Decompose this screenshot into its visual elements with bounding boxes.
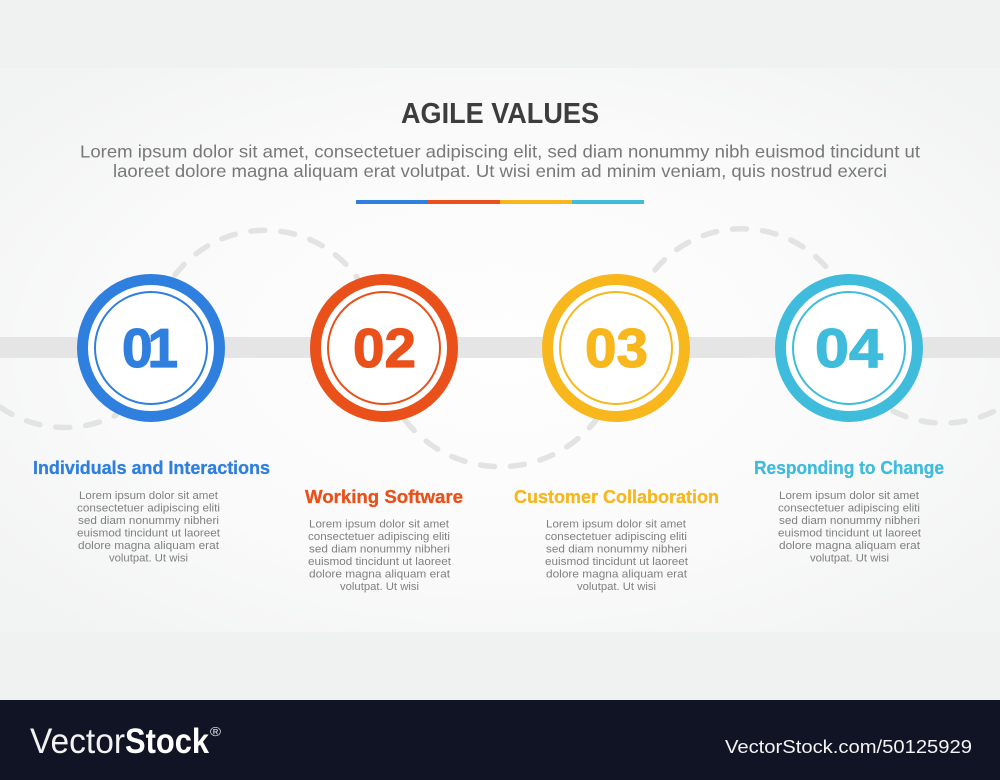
body text 02 <box>308 518 451 593</box>
body text 02: volutpat. Ut wisi <box>340 581 419 593</box>
footer bar <box>0 700 1000 780</box>
dashed connector arcs <box>0 229 1000 467</box>
step 04 text block <box>754 457 944 564</box>
body text 01: volutpat. Ut wisi <box>109 552 188 564</box>
step 03 circle <box>548 280 684 416</box>
subtitle text <box>80 142 920 181</box>
step 01 circle: 1 <box>148 317 178 379</box>
heading: individuals and interactions: Individuals and Interactions <box>33 457 270 478</box>
body text 02: dolore magna aliquam erat <box>309 568 450 580</box>
body text 01: Lorem ipsum dolor sit amet <box>79 490 218 502</box>
body text 04 <box>778 490 921 564</box>
body text 02: euismod tincidunt ut laoreet <box>308 556 451 568</box>
heading: customer collaboration: Customer Collaboration <box>514 486 719 507</box>
step 03 circle: 03 <box>585 317 648 379</box>
subtitle text: laoreet dolore magna aliquam erat volutpat. Ut wisi enim ad minim veniam, quis nostrud exerci <box>113 161 887 181</box>
timeline band <box>0 337 1000 358</box>
step 02 circle <box>316 280 452 416</box>
title: AGILE VALUES <box>401 98 599 130</box>
step 03 text block <box>514 486 719 593</box>
body text 04: dolore magna aliquam erat <box>779 540 920 552</box>
body text 01: consectetuer adipiscing eliti <box>77 502 220 514</box>
body text 03: Lorem ipsum dolor sit amet <box>546 518 686 530</box>
body text 04: consectetuer adipiscing eliti <box>778 502 920 514</box>
footer logo <box>30 722 221 761</box>
body text 03: euismod tincidunt ut laoreet <box>545 556 688 568</box>
body text 02: Lorem ipsum dolor sit amet <box>309 518 449 530</box>
body text 03: consectetuer adipiscing eliti <box>545 531 687 543</box>
step 01 text block <box>33 457 270 564</box>
footer logo: ® <box>210 724 221 739</box>
step 01 circle: 0 <box>122 317 153 379</box>
step 02 text block <box>305 486 463 593</box>
body text 03: dolore magna aliquam erat <box>546 568 687 580</box>
body text 04: Lorem ipsum dolor sit amet <box>779 490 919 502</box>
step 01 circle <box>82 280 220 416</box>
body text 02: consectetuer adipiscing eliti <box>308 531 450 543</box>
footer logo: Vector <box>30 722 125 761</box>
body text 04: volutpat. Ut wisi <box>810 552 889 564</box>
body text 04: sed diam nonummy nibheri <box>779 515 920 527</box>
footer logo: Stock <box>125 722 209 761</box>
footer image id: VectorStock.com/50125929 <box>725 736 972 757</box>
step 04 circle: 04 <box>815 317 883 379</box>
heading: responding to change: Responding to Change <box>754 457 944 478</box>
body text 03: sed diam nonummy nibheri <box>546 544 687 556</box>
body text 04: euismod tincidunt ut laoreet <box>778 528 921 540</box>
body text 01: euismod tincidunt ut laoreet <box>77 528 220 540</box>
body text 02: sed diam nonummy nibheri <box>309 544 450 556</box>
body text 01: sed diam nonummy nibheri <box>78 515 219 527</box>
body text 01: dolore magna aliquam erat <box>78 540 219 552</box>
body text 03: volutpat. Ut wisi <box>577 581 656 593</box>
step 02 circle: 02 <box>353 317 416 379</box>
heading: working software: Working Software <box>305 486 463 507</box>
subtitle text: Lorem ipsum dolor sit amet, consectetuer adipiscing elit, sed diam nonummy nibh euismod tincidunt ut <box>80 142 920 162</box>
step 04 circle <box>780 280 918 416</box>
colour divider bar <box>356 200 644 204</box>
body text 03 <box>545 518 688 593</box>
body text 01 <box>77 490 220 564</box>
